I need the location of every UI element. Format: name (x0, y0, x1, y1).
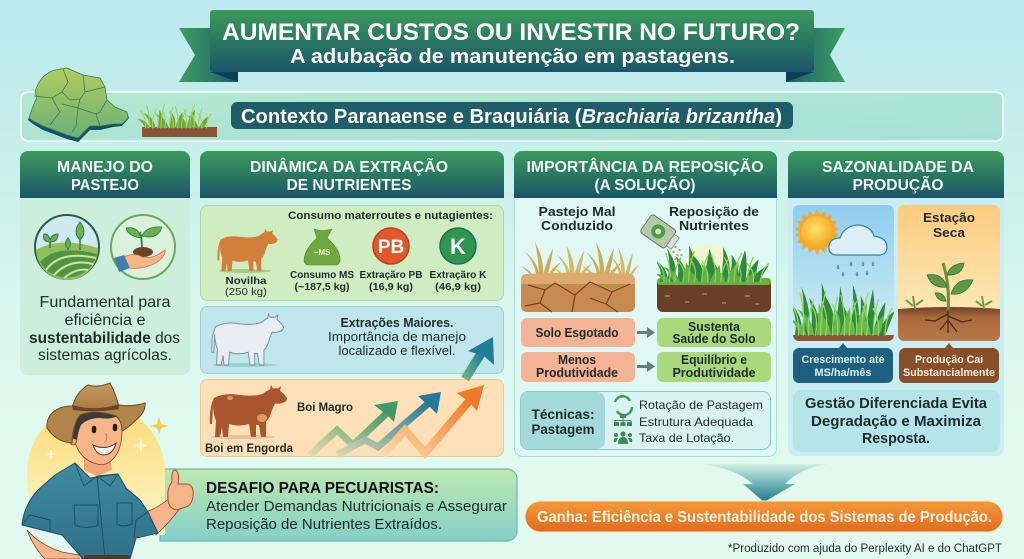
challenge box (160, 469, 517, 541)
icon: MS bag (304, 229, 340, 265)
stat: extração PB: Extraçãro PB (360, 270, 422, 281)
card text: Importância de manejo (328, 329, 466, 344)
label: estação seca (923, 210, 975, 240)
card: novilha (200, 206, 504, 300)
icon: people (614, 431, 632, 444)
fertilizer granules (673, 247, 682, 260)
panel header (514, 151, 777, 198)
conclusion box: Gestão Diferenciada Evita (805, 396, 988, 412)
panel body (514, 152, 776, 456)
roots (925, 310, 972, 333)
label: reposição de nutrientes: Nutrientes (679, 218, 749, 233)
stat: extração K: Extraçãro K (430, 270, 487, 281)
description text (29, 294, 180, 364)
title line 1: AUMENTAR CUSTOS OU INVESTIR NO FUTURO? (222, 19, 800, 46)
plant (906, 263, 992, 312)
heading line 2: DE NUTRIENTES (286, 177, 412, 194)
panel body (20, 151, 190, 375)
technique label: Técnicas: (532, 406, 594, 422)
stat: consumo MS (290, 270, 354, 293)
icon: brown cow (210, 385, 287, 439)
shirt details (22, 463, 148, 559)
callout: crescimento (793, 343, 893, 383)
hair (72, 412, 119, 440)
box: menos produtividade: Menos (558, 353, 596, 367)
stat: extração K: (46,9 kg) (435, 281, 481, 293)
icon: heifer (217, 229, 278, 273)
label: reposição de nutrientes: Reposição de (669, 204, 759, 219)
stat: consumo MS: Consumo MS (290, 270, 354, 281)
heading: DINÂMICA DA EXTRAÇÃO (250, 156, 448, 176)
heading: SAZONALIDADE DA (822, 159, 974, 176)
shirt (22, 463, 158, 559)
heading line 2: (A SOLUÇÃO) (594, 174, 696, 194)
ribbon fold shading (210, 72, 814, 82)
icon: map of Paraná (28, 68, 129, 142)
label: boi magro: Boi Magro (297, 402, 353, 414)
nose (104, 433, 107, 442)
arrow: down to result (700, 464, 828, 502)
description text: Fundamental para (40, 294, 171, 311)
challenge text: Reposição de Nutrientes Extraídos. (206, 517, 442, 533)
icon: PB badge (373, 228, 409, 264)
icon: K badge (440, 228, 476, 264)
card: extrações maiores (200, 306, 504, 374)
stat: extração K (430, 270, 487, 293)
result pill (525, 501, 1003, 532)
arrow: blue (337, 392, 441, 455)
neck (84, 455, 112, 476)
technique list: Taxa de Lotação. (639, 431, 734, 445)
halo (27, 403, 165, 535)
box: equilíbrio e produtividade: Produtividade (672, 366, 756, 380)
context bar (21, 68, 1003, 142)
icon: sun (795, 209, 839, 255)
label: boi em engorda: Boi em Engorda (205, 443, 294, 455)
icon: MS bag: ~MS (314, 248, 331, 257)
label: novilha: Novilha (226, 275, 267, 287)
heading: MANEJO DO (57, 159, 153, 176)
arrow: to sustenta (637, 327, 655, 338)
label: pastejo mal conduzido (538, 204, 616, 233)
hat band (72, 404, 119, 411)
smile (93, 443, 116, 455)
challenge text: Atender Demandas Nutricionais e Assegurar (206, 499, 507, 515)
arm: left lower (27, 530, 84, 559)
arrow: orange (383, 385, 484, 455)
technique label (532, 406, 594, 437)
title line 2: A adubação de manutenção em pastagens. (290, 46, 735, 68)
panel: manejo do pastejo (20, 151, 190, 375)
box: sustenta saúde do solo (657, 318, 771, 347)
icon: white cow (212, 314, 283, 367)
footnote: *Produzido com ajuda do Perplexity AI e do ChatGPT (728, 543, 1002, 555)
label: pastejo mal conduzido: Conduzido (541, 218, 613, 233)
subtitle pill (231, 102, 793, 129)
description text: sistemas agrícolas. (38, 347, 172, 364)
icon: rotation (615, 396, 632, 415)
heading line 2: PRODUÇÃO (852, 174, 944, 194)
icon: K badge: K (450, 234, 466, 259)
card text: localizado e flexível. (338, 343, 456, 358)
box: equilíbrio e produtividade: Equilíbrio e (681, 353, 747, 367)
technique list: Estrutura Adequada (639, 415, 753, 429)
label: weight: (250 kg) (225, 286, 267, 298)
panel: dinâmica da extração (200, 151, 504, 456)
stat: extração PB (360, 270, 422, 293)
panel header (788, 151, 1004, 198)
stat: extração PB: (16,9 kg) (369, 281, 413, 293)
icon: fertilizer bottle (640, 214, 682, 252)
callout: produção cai: Produção Cai (915, 354, 983, 366)
box: técnicas (520, 392, 770, 450)
hat crown (72, 383, 119, 411)
hand: thumbs up (168, 470, 193, 510)
heading: IMPORTÂNCIA DA REPOSIÇÃO (526, 156, 764, 176)
icon: structure (614, 414, 632, 426)
conclusion box: Resposta. (862, 431, 930, 447)
heading line 2: PASTEJO (71, 177, 139, 194)
result pill: Ganha: Eficiência e Sustentabilidade dos Sistemas de Produção. (537, 509, 992, 526)
bar background (21, 92, 1003, 141)
arm: right raised (146, 496, 181, 535)
card text (328, 315, 466, 358)
panel header (200, 151, 504, 198)
sparkles (150, 417, 168, 435)
ear (69, 431, 77, 445)
title banner (179, 10, 845, 82)
description text: sustentabilidade dos (29, 330, 180, 347)
icon: rain cloud (829, 225, 887, 276)
sparkles on halo (46, 438, 148, 459)
panel: sazonalidade da produção (788, 151, 1004, 456)
illustration: dry season (898, 205, 1000, 341)
description text: eficiência e (64, 312, 146, 329)
box: solo esgotado: Solo Esgotado (536, 326, 619, 340)
ribbon main (210, 10, 814, 72)
callout: crescimento: Crescimento até (802, 354, 884, 366)
card: boi em engorda (200, 337, 504, 456)
illustration: degraded soil (521, 242, 639, 312)
callout: produção cai: Substancialmente (903, 367, 995, 379)
box: menos produtividade (521, 352, 635, 382)
belt (84, 555, 130, 559)
conclusion box: Degradação e Maximiza (811, 414, 982, 430)
label: estação seca: Seca (933, 225, 966, 240)
arrow: rising top (465, 337, 494, 379)
illustration: rainy season (789, 205, 895, 341)
label: reposição de nutrientes (669, 204, 759, 233)
icon: hand with sprout (111, 215, 175, 279)
box: sustenta saúde do solo: Saúde do Solo (672, 332, 756, 346)
soil (898, 307, 1000, 341)
box: menos produtividade: Produtividade (536, 366, 618, 380)
box: solo esgotado (521, 318, 635, 347)
ribbon tail left (179, 28, 238, 82)
face (74, 412, 122, 465)
icon: grass with soil (137, 104, 217, 137)
stat: consumo MS: (~187,5 kg) (294, 281, 350, 293)
illustration: healthy soil (653, 244, 771, 312)
arrow: green (310, 401, 398, 455)
panel: importância da reposição (514, 151, 777, 456)
panel body (788, 151, 1004, 456)
icon: PB badge: PB (378, 237, 404, 258)
box: equilíbrio e produtividade (657, 352, 771, 382)
technique list: Rotação de Pastagem (639, 398, 763, 412)
hat brim (47, 403, 145, 443)
label: pastejo mal conduzido: Pastejo Mal (538, 204, 616, 219)
illustration: farmer (22, 383, 193, 559)
ribbon tail right (786, 28, 845, 82)
panel header (20, 151, 190, 198)
technique label: Pastagem (532, 422, 594, 437)
grass (789, 282, 895, 341)
challenge text (206, 499, 507, 533)
challenge heading: DESAFIO PARA PECUARISTAS: (206, 480, 439, 497)
card heading: Consumo materroutes e nutagientes: (288, 210, 493, 222)
icon: fields and trees (35, 215, 99, 280)
arrow: to equilíbrio (637, 361, 655, 372)
label: estação seca: Estação (923, 210, 975, 225)
box: sustenta saúde do solo: Sustenta (688, 320, 741, 334)
technique list (639, 398, 763, 445)
technique label panel (521, 392, 605, 449)
callout: crescimento: MS/ha/mês (814, 367, 872, 379)
conclusion box (793, 390, 1000, 452)
callout: produção cai (899, 343, 999, 383)
subtitle text: Contexto Paranaense e Braquiária (Brachiaria brizantha) (241, 106, 782, 128)
eyes (94, 426, 115, 431)
card text: Extrações Maiores. (340, 315, 454, 330)
